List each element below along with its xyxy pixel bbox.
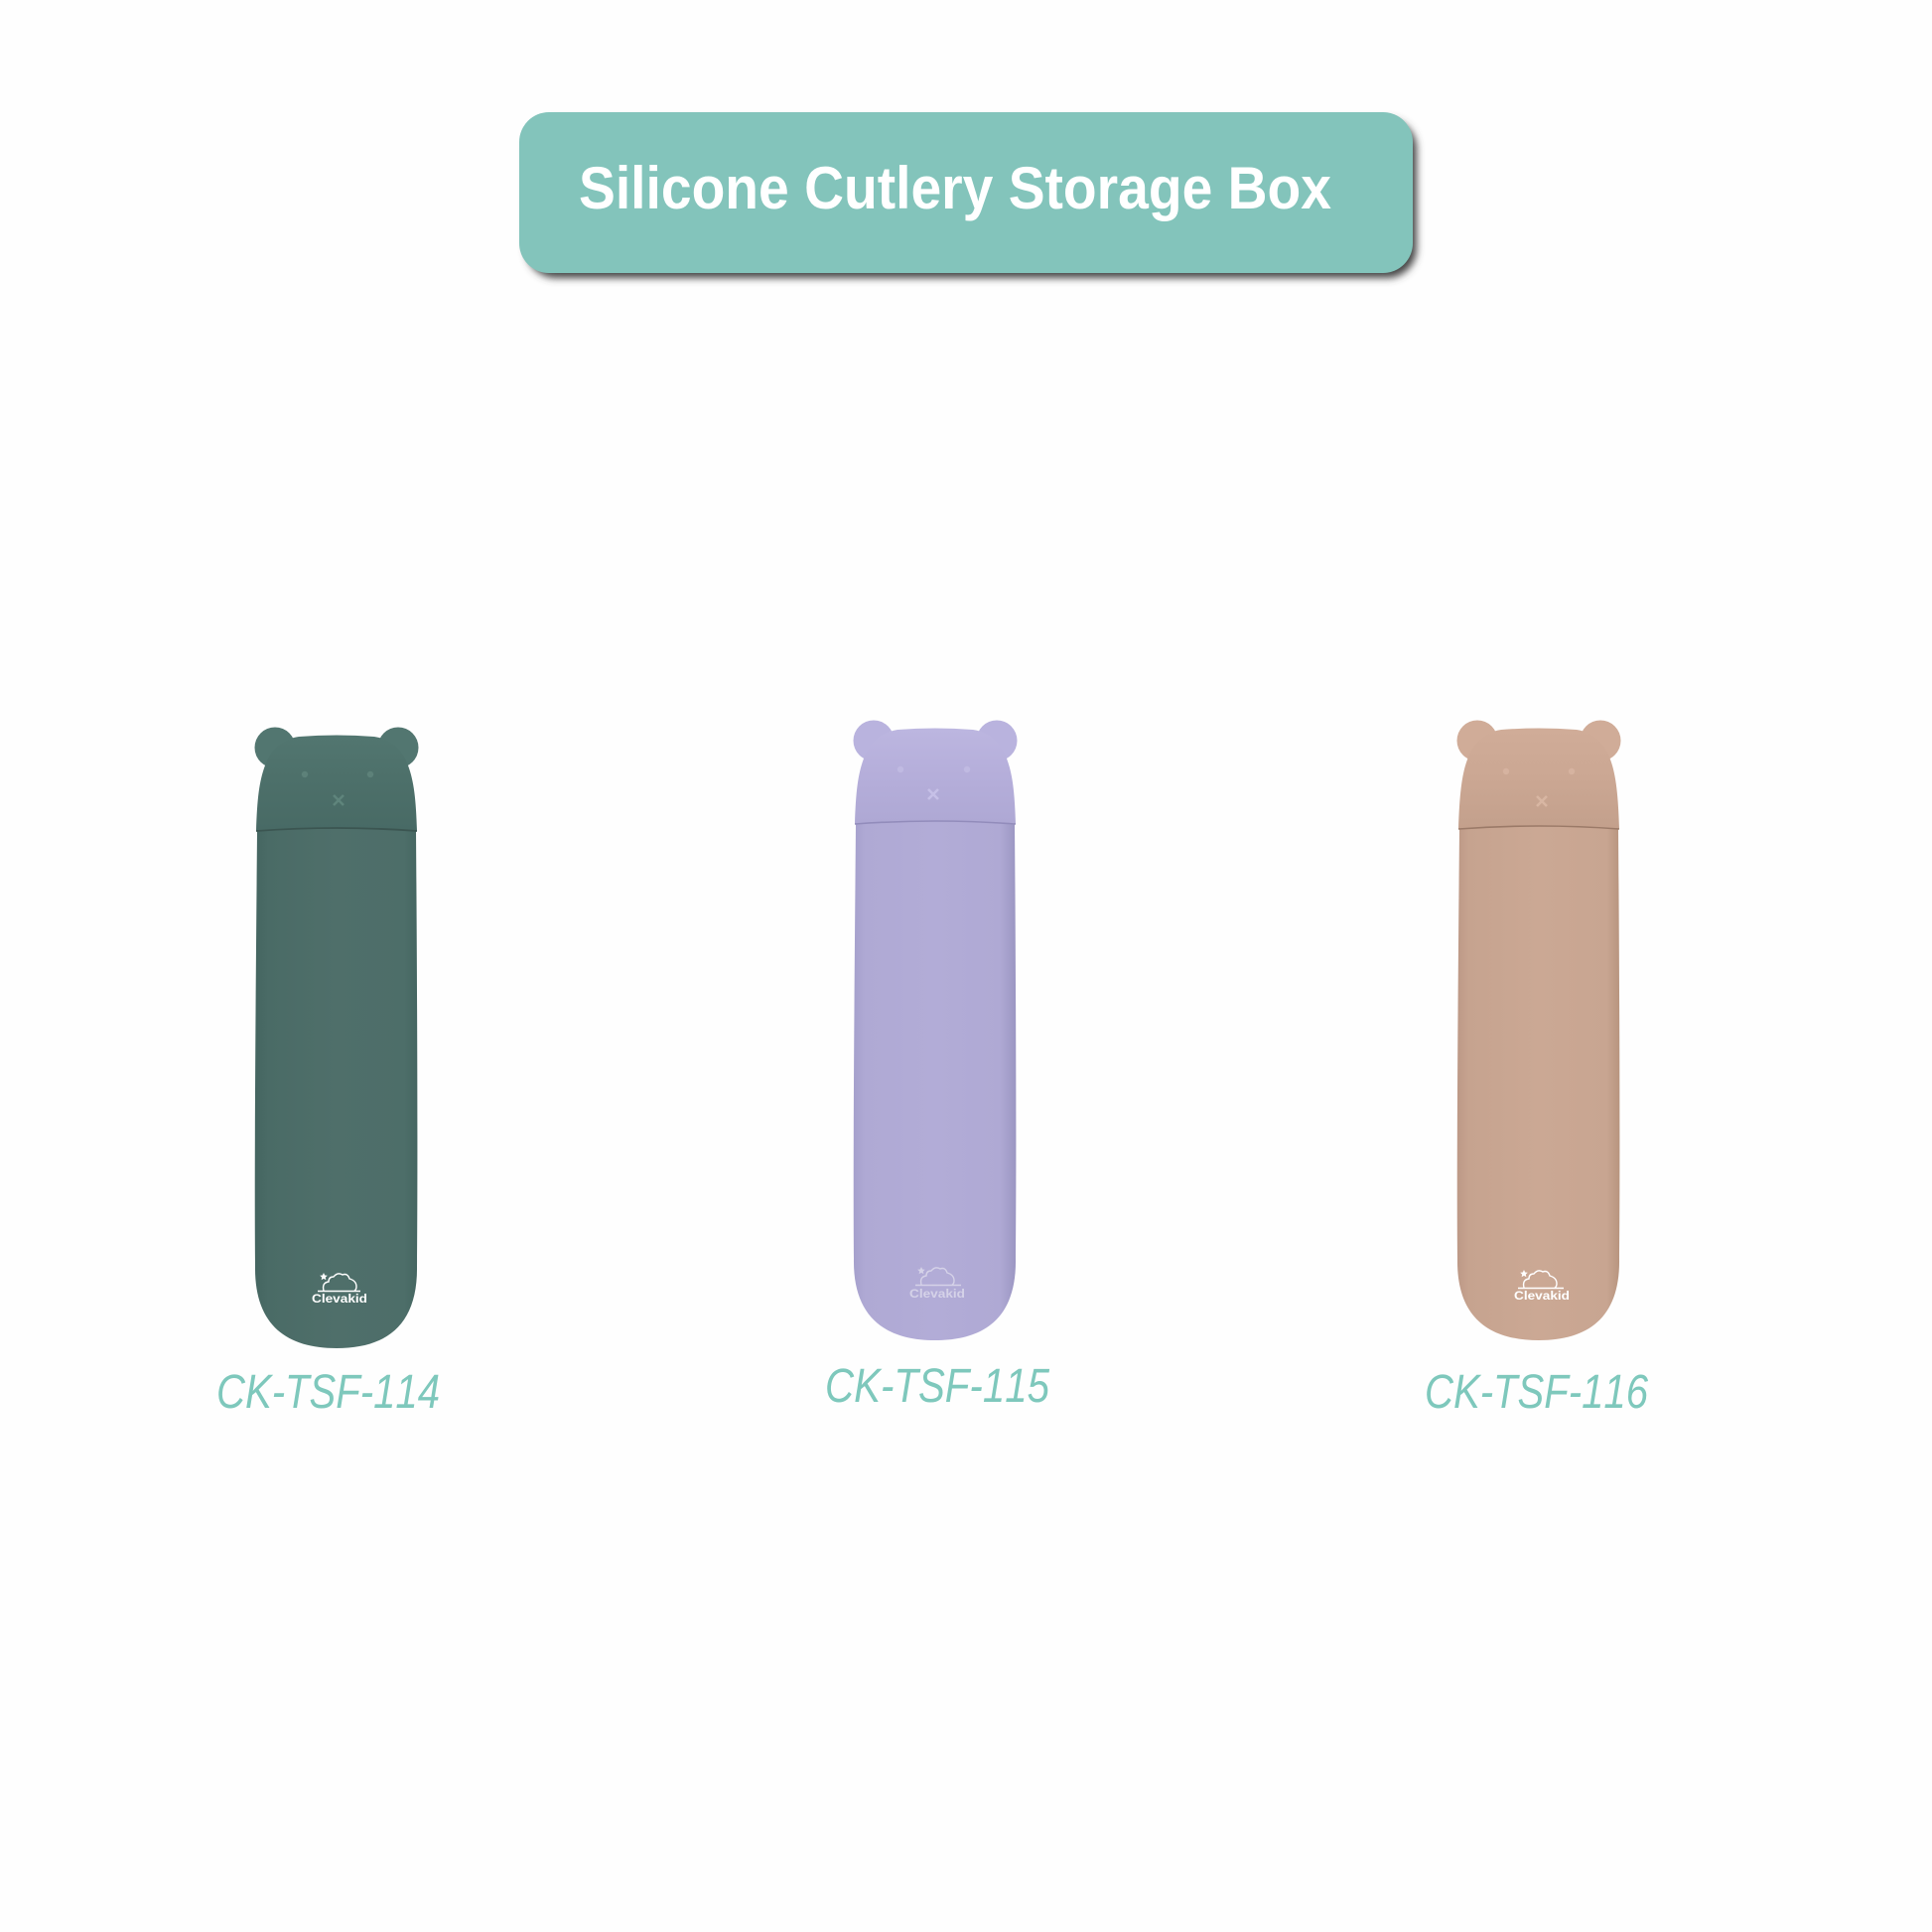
Clevakid logo bbox=[1514, 1270, 1570, 1303]
bear face bbox=[302, 771, 373, 805]
bear ears bbox=[254, 727, 419, 768]
bear ears bbox=[854, 721, 1017, 760]
seam bbox=[256, 828, 417, 831]
seam bbox=[855, 821, 1016, 824]
Clevakid logo bbox=[909, 1267, 965, 1301]
Clevakid logo bbox=[312, 1273, 367, 1306]
seam bbox=[1458, 826, 1619, 829]
product: purple bear box bbox=[854, 721, 1017, 1340]
title banner bbox=[519, 112, 1417, 278]
Clevakid logo: Clevakid bbox=[1514, 1289, 1570, 1303]
bear face bbox=[1503, 768, 1575, 806]
box body bbox=[1457, 826, 1619, 1340]
model label: CK-TSF-115: CK-TSF-115 bbox=[825, 1360, 1049, 1413]
Clevakid logo: Clevakid bbox=[312, 1292, 367, 1306]
bear lid bbox=[1458, 729, 1619, 829]
box body bbox=[255, 828, 417, 1348]
bear lid bbox=[256, 735, 417, 831]
bear face bbox=[897, 766, 970, 799]
bear ears bbox=[1457, 721, 1620, 760]
product: tan bear box bbox=[1457, 721, 1620, 1340]
product: green bear box bbox=[254, 727, 419, 1348]
bear lid bbox=[855, 729, 1016, 824]
model label: CK-TSF-116: CK-TSF-116 bbox=[1425, 1366, 1648, 1419]
title text: Silicone Cutlery Storage Box bbox=[579, 155, 1331, 221]
box body bbox=[854, 821, 1016, 1340]
Clevakid logo: Clevakid bbox=[909, 1287, 965, 1301]
model label: CK-TSF-114: CK-TSF-114 bbox=[216, 1366, 440, 1419]
